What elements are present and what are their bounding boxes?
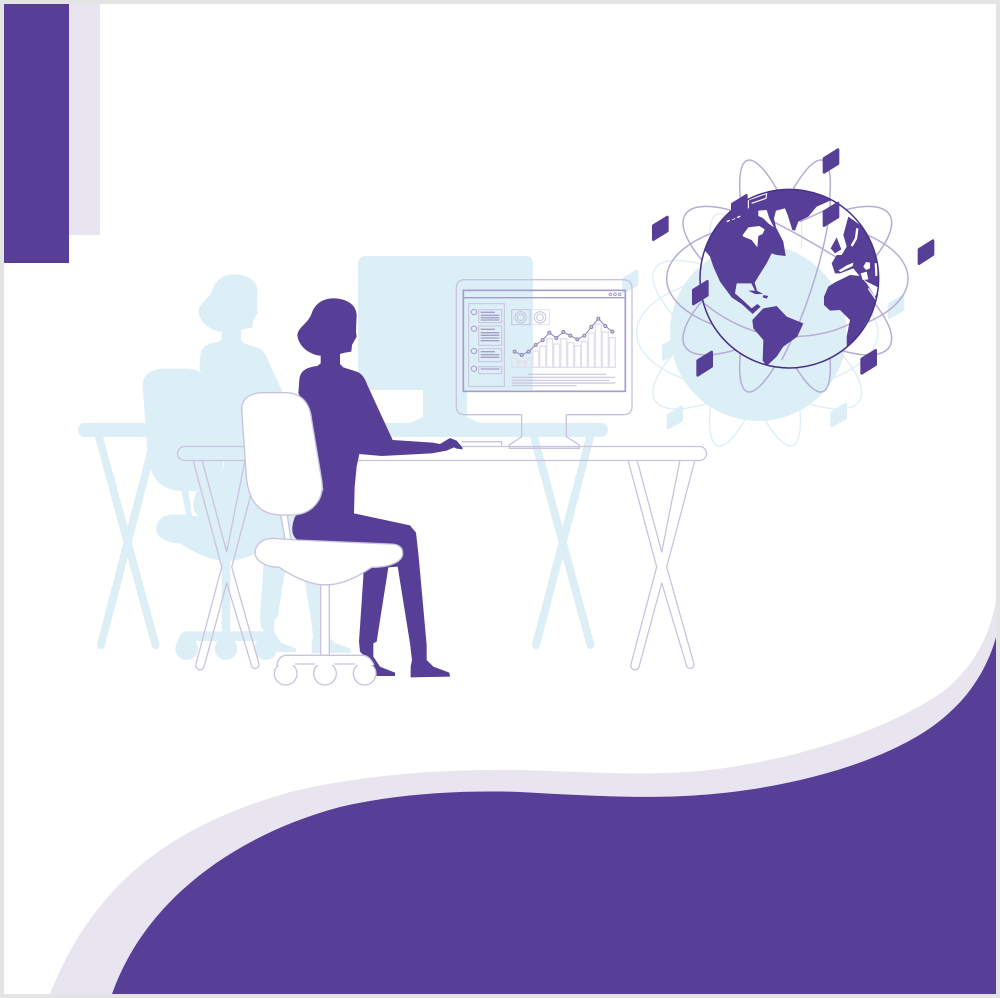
ghost desk legs <box>99 437 590 645</box>
Mediterranean west <box>838 263 853 272</box>
ghost desk top <box>78 423 608 437</box>
computer monitor with dashboard <box>456 280 632 448</box>
Baltic sea <box>852 228 857 246</box>
ocean <box>702 201 867 367</box>
orbit rings <box>664 152 911 400</box>
chair seat <box>255 538 403 585</box>
browser title bar <box>463 293 625 298</box>
chair back support <box>281 515 291 540</box>
ghost satellite chips <box>623 271 903 428</box>
pale wave <box>50 600 996 994</box>
ghost globe disc <box>670 244 847 421</box>
monitor body and stand <box>456 280 632 448</box>
Europe and Asia edge <box>832 216 878 287</box>
purple wave <box>112 637 996 994</box>
bottom decorative waves <box>50 600 996 994</box>
Red Sea <box>868 288 877 301</box>
South America <box>752 306 803 366</box>
globe ocean and continents <box>702 190 878 367</box>
gauge widgets <box>512 310 549 325</box>
ghost chair column <box>222 561 230 631</box>
Great Britain <box>831 237 841 253</box>
ghost desk and computer <box>78 256 608 645</box>
globe with orbits <box>653 150 933 421</box>
top-left purple accent bar <box>4 4 69 263</box>
Mediterranean east <box>861 262 877 280</box>
keyboard <box>462 442 502 447</box>
left desk legs <box>193 460 260 670</box>
chair back <box>242 393 322 515</box>
Arctic island gaps <box>727 216 742 222</box>
message sidebar <box>469 304 504 386</box>
ghost person silhouette <box>193 274 364 653</box>
orbit arcs seen through the ocean <box>704 200 850 360</box>
dashboard text lines <box>512 374 615 386</box>
top-left pale accent bar <box>69 4 100 235</box>
Baffin sea <box>758 210 774 227</box>
Africa <box>824 275 877 346</box>
Hudson Bay <box>743 226 765 247</box>
line chart <box>513 317 614 356</box>
Arctic channels <box>748 193 767 208</box>
chair casters and base <box>274 655 376 685</box>
bar chart <box>512 324 615 367</box>
globe outline <box>700 189 879 368</box>
seated person with office chair <box>242 298 463 685</box>
desk top <box>178 446 706 460</box>
continents <box>705 190 878 364</box>
ghost seated person with chair <box>143 274 364 660</box>
ghost chair back support <box>182 491 192 516</box>
foreground desk <box>178 446 706 670</box>
ghost monitor <box>358 256 533 423</box>
North America and Greenland <box>705 190 831 314</box>
ghost orbit rings <box>634 206 881 454</box>
right desk legs <box>628 460 695 670</box>
browser window <box>463 290 625 391</box>
ghost chair base <box>175 631 277 660</box>
person silhouette <box>292 298 463 677</box>
chair column <box>321 585 329 655</box>
ghost globe with orbits and chips <box>623 206 903 454</box>
Caribbean islands <box>748 291 768 299</box>
ghost chair back <box>143 369 223 491</box>
ghost chair seat <box>156 514 304 561</box>
satellite chips <box>653 150 933 375</box>
